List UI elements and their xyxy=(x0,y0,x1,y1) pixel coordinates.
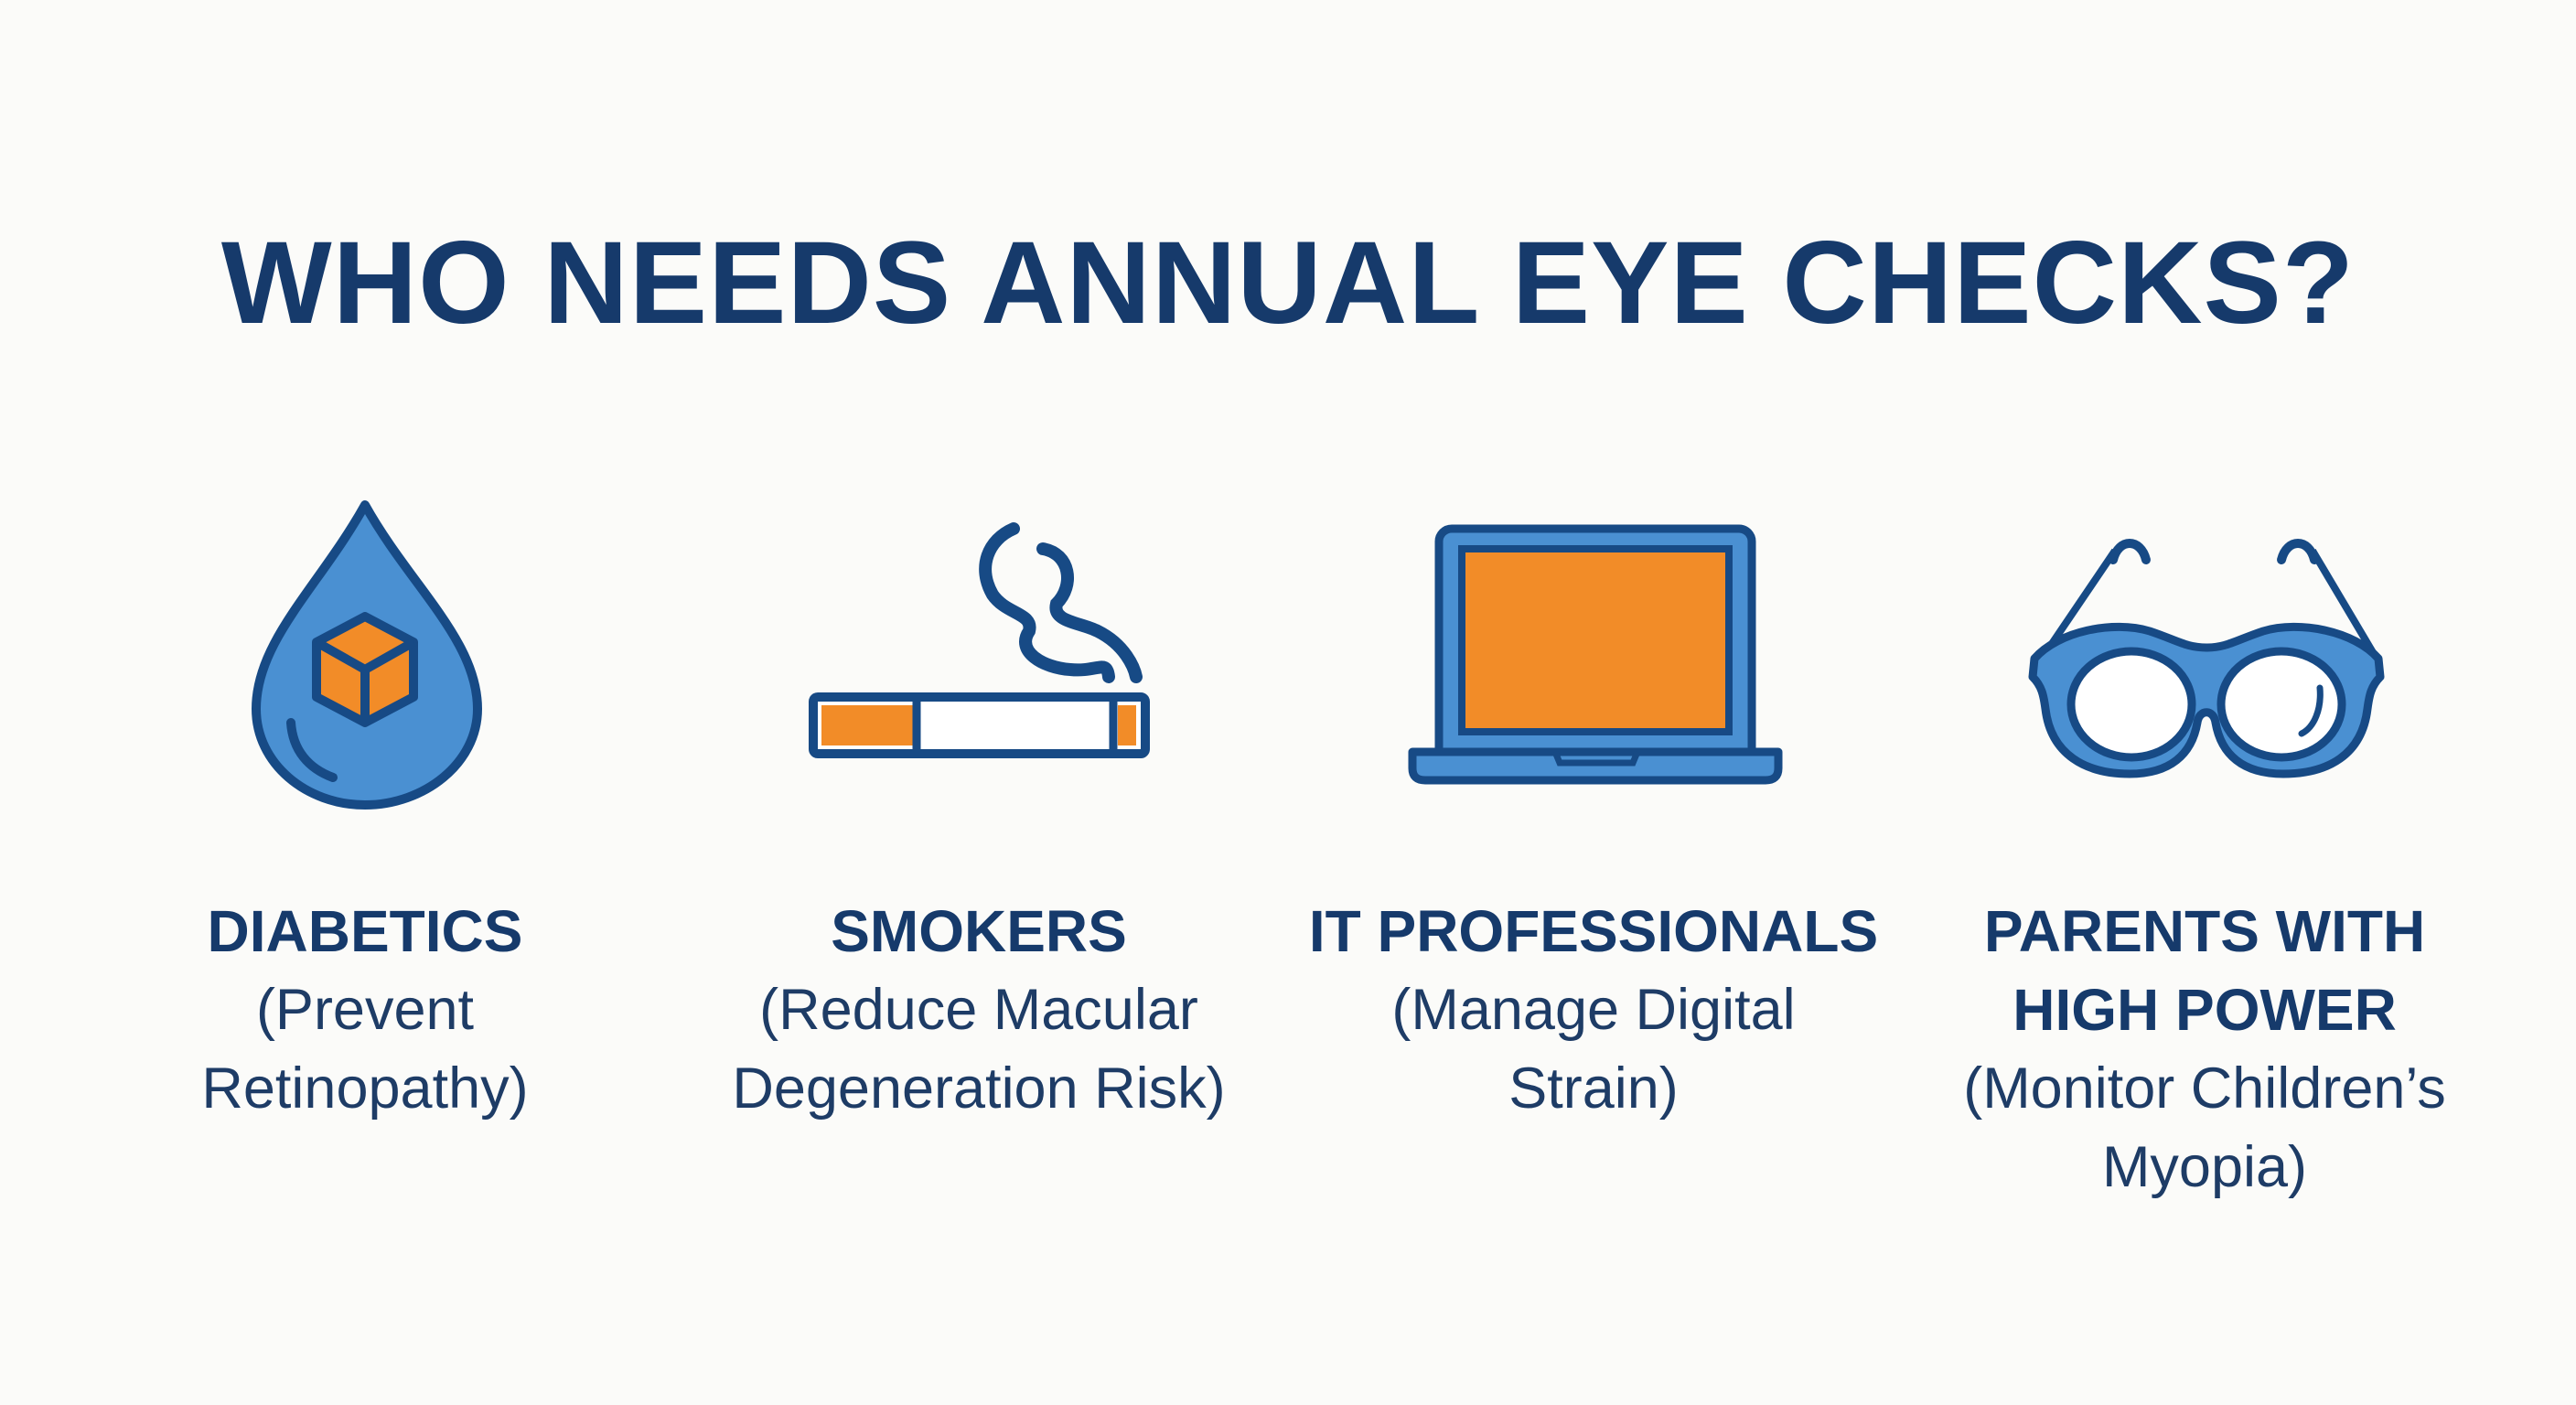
column: diabetics text: (Prevent xyxy=(256,978,474,1042)
column: diabetics text xyxy=(201,898,529,1121)
icon: laptop xyxy=(1412,529,1778,780)
column: smokers text xyxy=(732,898,1226,1121)
column: parents text: (Monitor Children’s xyxy=(1963,1056,2446,1121)
column: parents text: HIGH POWER xyxy=(2012,977,2397,1043)
icon: cigarette xyxy=(813,529,1145,754)
column: IT professionals text: (Manage Digital xyxy=(1391,978,1796,1042)
column: smokers text: Degeneration Risk) xyxy=(732,1056,1226,1121)
column: smokers text: SMOKERS xyxy=(831,898,1127,964)
column: diabetics text: Retinopathy) xyxy=(201,1056,529,1121)
column: parents text: Myopia) xyxy=(2102,1135,2307,1199)
column: parents text: PARENTS WITH xyxy=(1984,898,2425,964)
column: IT professionals text xyxy=(1309,898,1878,1121)
title: WHO NEEDS ANNUAL EYE CHECKS? xyxy=(221,218,2355,349)
column: smokers text: (Reduce Macular xyxy=(759,978,1198,1042)
icon: glasses xyxy=(2033,543,2380,774)
icon: water drop with cube xyxy=(256,505,478,805)
column: IT professionals text: Strain) xyxy=(1508,1056,1679,1121)
column: parents text xyxy=(1963,898,2446,1199)
column: diabetics text: DIABETICS xyxy=(208,898,522,964)
column: IT professionals text: IT PROFESSIONALS xyxy=(1309,898,1878,964)
